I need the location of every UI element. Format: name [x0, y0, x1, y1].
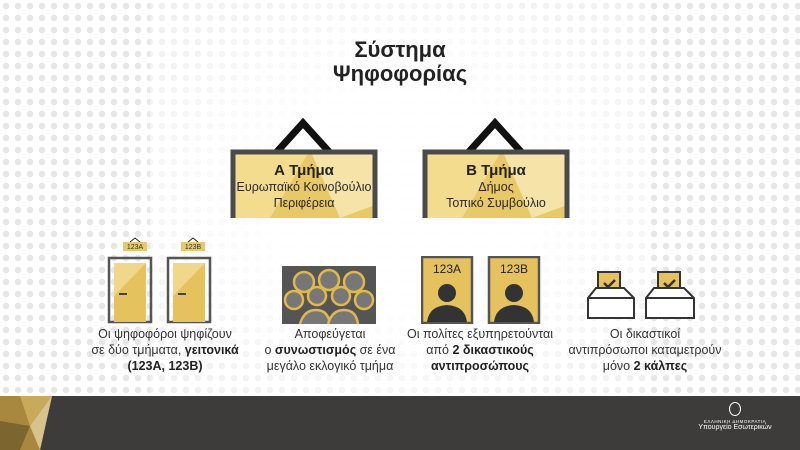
text: portraits: αντιπροσώπους: [431, 359, 529, 373]
sign B: Δήμος: [478, 180, 514, 194]
text: crowd: ο συνωστισμός σε ένα: [264, 343, 396, 357]
background fade: [150, 0, 650, 396]
sign A: Α Τμήμα: [274, 162, 334, 179]
text: doors: σε δύο τμήματα, γειτονικά: [91, 343, 239, 357]
icon: doors: [108, 237, 212, 324]
text: portraits: Οι πολίτες εξυπηρετούνται: [407, 327, 553, 341]
sign A: Περιφέρεια: [274, 196, 334, 210]
icon: ballot boxes: [587, 271, 695, 319]
text: ballot boxes: αντιπρόσωποι καταμετρούν: [568, 343, 722, 357]
footer logo: Υπουργείο Εσωτερικών: [698, 424, 772, 431]
footer: [0, 396, 800, 450]
footer gold pattern: [0, 396, 52, 450]
sign A: Ευρωπαϊκό Κοινοβούλιο: [237, 180, 371, 194]
sign B: Β Τμήμα: [466, 162, 526, 179]
footer logo: ΕΛΛΗΝΙΚΗ ΔΗΜΟΚΡΑΤΙΑ: [704, 419, 766, 424]
icon: portraits: 123A: [433, 262, 461, 276]
text: portraits: [407, 327, 553, 373]
text: doors: (123Α, 123Β): [127, 359, 203, 373]
sign B: Τοπικό Συμβούλιο: [446, 196, 546, 210]
text: crowd: μεγάλο εκλογικό τμήμα: [267, 359, 393, 373]
text: doors: [91, 327, 239, 373]
icon: crowd: [282, 266, 376, 324]
text: portraits: από 2 δικαστικούς: [426, 343, 534, 357]
text: ballot boxes: μόνο 2 κάλπες: [603, 359, 687, 373]
text: crowd: Αποφεύγεται: [295, 327, 365, 341]
icon: doors: 123A: [127, 244, 143, 251]
icon: doors: 123B: [185, 244, 201, 251]
title: [333, 37, 467, 86]
sign A: [230, 118, 378, 218]
footer logo: [698, 402, 772, 431]
text: ballot boxes: Οι δικαστικοί: [610, 327, 680, 341]
title: Σύστημα: [354, 37, 446, 62]
title: Ψηφοφορίας: [333, 61, 467, 86]
text: doors: Οι ψηφοφόροι ψηφίζουν: [98, 327, 232, 341]
sign B: [422, 118, 570, 218]
text: ballot boxes: [568, 327, 722, 373]
icon: portraits: [421, 256, 540, 324]
icon: portraits: 123B: [500, 262, 528, 276]
text: crowd: [264, 327, 396, 373]
